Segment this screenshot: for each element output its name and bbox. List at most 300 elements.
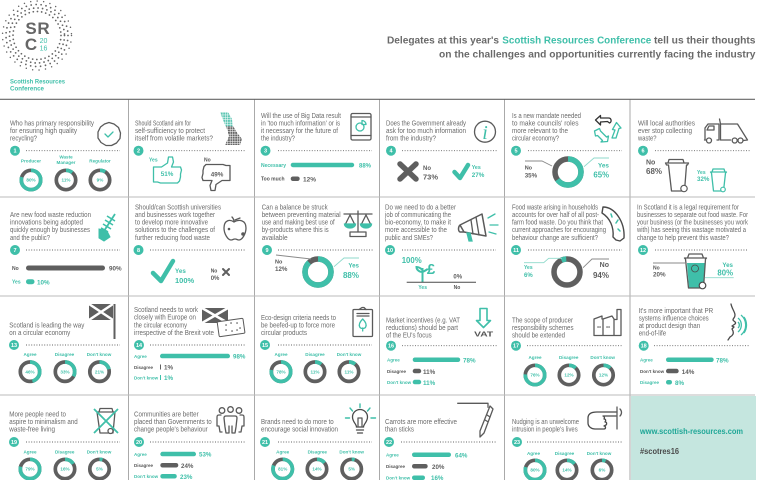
donut: 65% yes xyxy=(555,159,581,185)
question text: be beefed-up to force more xyxy=(261,322,335,330)
donut: Agree 80%: 80% xyxy=(530,468,540,473)
panel: question 16 xyxy=(386,308,497,387)
question text xyxy=(134,307,214,337)
question text: circular products xyxy=(261,330,307,337)
question text: Should/can Scottish universities xyxy=(135,204,221,212)
donut: Agree 46%: 46% xyxy=(25,369,35,374)
panel: question 3 xyxy=(260,113,372,184)
question text: to make councils' roles xyxy=(512,120,579,128)
question text: Do we need to do a better xyxy=(385,204,457,212)
bar: Agree 78%: Agree xyxy=(387,358,400,362)
bar: Don't know 11%: 11% xyxy=(423,380,436,387)
number badge: 13 xyxy=(11,343,17,349)
question text: Does the Government already xyxy=(386,120,466,128)
callout: Yes 88%: 88% xyxy=(343,271,359,280)
number badge: 3 xyxy=(264,149,267,155)
label: Regulator: Regulator xyxy=(89,158,111,164)
callout: Yes 80% xyxy=(705,262,734,278)
value: Yes 27% xyxy=(472,165,485,179)
axis label: No: No xyxy=(454,285,460,291)
icon: badge with check xyxy=(98,122,120,146)
donut: Disagree 16%: 16% xyxy=(60,467,70,472)
value: No 0%: No xyxy=(211,268,217,274)
bar: Don't know 1%: Don't know xyxy=(134,376,159,380)
label: Agree: Agree xyxy=(527,451,540,456)
question text: The scope of producer xyxy=(512,318,574,324)
question text: should be extended xyxy=(512,332,565,340)
icon: check xyxy=(454,165,468,178)
number badge: 19 xyxy=(11,440,17,446)
icon: face with sound waves xyxy=(728,304,747,340)
question text: on a circular economy xyxy=(9,330,71,337)
number badge: 14 xyxy=(136,343,143,349)
callout: No 20% xyxy=(653,263,685,278)
question text: use and making best use of xyxy=(262,220,335,226)
callout: No 12%: 12% xyxy=(275,266,288,273)
title: tell us their thoughts xyxy=(654,34,756,46)
bar: Disagree 11%: Disagree xyxy=(387,369,407,374)
callout: No 94%: No xyxy=(600,262,609,269)
callout: No 35%: No xyxy=(525,166,533,172)
number badge: 11 xyxy=(513,248,519,254)
bar: Agree 78%: Agree xyxy=(640,358,653,362)
question text: job of communicating the xyxy=(384,212,451,219)
callout: Yes 65% xyxy=(584,158,609,180)
hashtag: #scotres16 xyxy=(640,447,680,456)
panel: question 1 xyxy=(10,120,120,190)
label: Agree: Agree xyxy=(276,450,290,454)
panel: question 6 xyxy=(637,119,750,192)
panel: question 18 xyxy=(639,304,750,387)
question text: irrespective of the Brexit vote xyxy=(134,330,214,337)
number badge: 2 xyxy=(137,149,140,155)
value: Yes 100%: Yes xyxy=(175,268,186,275)
question text: behaviour change are sufficient? xyxy=(512,235,598,242)
callout: No 35% xyxy=(525,161,552,180)
question text xyxy=(386,120,466,142)
label: Disagree: Disagree xyxy=(55,352,75,357)
question text: between preventing material xyxy=(262,212,341,219)
panel: question 22 xyxy=(384,403,496,480)
bar: Necessary 88%: 88% xyxy=(359,164,372,170)
question text: the industry? xyxy=(261,136,295,142)
bar: Agree 64%: 64% xyxy=(455,452,468,459)
logo: SRC 2016: R xyxy=(37,19,50,38)
callout: Yes 88%: Yes xyxy=(348,262,360,270)
value: No 73% xyxy=(423,166,438,182)
question text: change to help prevent this waste? xyxy=(637,235,729,242)
icon: plant with pound sign: £ xyxy=(427,261,436,278)
donut: Disagree 14%: 14% xyxy=(312,467,322,472)
value: No 68%: 68% xyxy=(646,167,662,176)
axis label: Yes: Yes xyxy=(418,285,427,291)
bar: Disagree 11%: 11% xyxy=(423,369,436,376)
label: Waste Manager: Manager xyxy=(57,160,76,165)
callout: Yes 65%: Yes xyxy=(598,162,609,170)
question text: from the industry? xyxy=(386,136,436,142)
question text xyxy=(512,204,606,242)
question text: in 'too much information' or is xyxy=(261,120,340,128)
question text: more relevant to the xyxy=(512,128,568,135)
bar: Agree 78% xyxy=(387,358,476,364)
donut: Don't know 21%: 21% xyxy=(95,369,104,374)
number badge: 4 xyxy=(389,149,393,155)
label: Agree: Agree xyxy=(528,355,542,360)
bar: Don't know 14%: 14% xyxy=(682,369,695,376)
callout: Yes 6%: Yes xyxy=(524,265,533,271)
value: Yes 27%: 27% xyxy=(472,172,485,179)
question text: circular economy? xyxy=(512,136,559,142)
number badge: 7 xyxy=(13,248,17,254)
icon: clipboard with leaf xyxy=(353,308,372,336)
bar: Don't know 11%: Don't know xyxy=(387,380,412,385)
icon: thumb down 49%: 49% xyxy=(211,172,224,178)
bar: Agree 98% xyxy=(134,354,246,360)
donut: Don't know 5%: 5% xyxy=(348,467,355,472)
bar: Agree 53% xyxy=(134,452,212,458)
icon: scales xyxy=(344,211,372,236)
value: 0%: 0% xyxy=(453,274,463,280)
panel: question 19 xyxy=(8,408,120,479)
question text: businesses to separate out food waste. For xyxy=(637,212,749,219)
bar: Agree 78%: 78% xyxy=(463,358,476,364)
icon: tablet with chart xyxy=(351,114,371,140)
question text: Carrots are more effective xyxy=(385,419,457,426)
panel: question 12 xyxy=(636,204,749,289)
bar: Disagree 1% xyxy=(134,364,174,372)
question text xyxy=(8,412,78,434)
value: No 0% xyxy=(211,268,220,282)
bar: Disagree 24%: Disagree xyxy=(134,463,154,468)
bar: No 90%: 90% xyxy=(109,266,122,272)
question text xyxy=(512,113,581,142)
icon: UK map xyxy=(220,112,242,145)
question text: to develop more innovative xyxy=(135,220,208,226)
bar: Necessary 88%: Necessary xyxy=(261,163,286,169)
donut: Disagree 33%: 33% xyxy=(60,369,70,374)
question text: the circular economy xyxy=(134,322,187,329)
callout: Yes 65%: 65% xyxy=(593,170,609,180)
donut: Agree 81%: 81% xyxy=(278,467,287,472)
question text: Food waste arising in households xyxy=(512,204,598,212)
bar: Too much 12% xyxy=(261,176,316,184)
question text xyxy=(9,322,85,337)
question text xyxy=(10,120,94,142)
donut: Producer 80%: 80% xyxy=(26,178,36,183)
callout: Yes 6% xyxy=(524,258,562,279)
donut: Don't know 6%: 6% xyxy=(599,468,605,473)
question text: itself from volatile markets? xyxy=(135,136,213,142)
number badge: 16 xyxy=(388,344,394,350)
callout: Yes 6%: 6% xyxy=(524,273,533,279)
donut: Don't know 5%: 5% xyxy=(96,467,103,472)
panel: question 10 xyxy=(384,204,498,291)
bar: Too much 12%: 12% xyxy=(303,176,316,184)
title: Delegates at this year's xyxy=(387,34,499,46)
question text xyxy=(384,204,457,242)
logo: SRC 2016 xyxy=(2,1,72,92)
question text xyxy=(10,212,91,242)
question text: change people's behaviour xyxy=(134,427,208,434)
label: Disagree: Disagree xyxy=(305,352,325,357)
panel: question 7 xyxy=(10,212,122,286)
label: Don't know: Don't know xyxy=(590,355,615,360)
icon: megaphone xyxy=(458,214,498,241)
question text: solutions to the challenges of xyxy=(135,227,215,234)
bar: Disagree 24% xyxy=(134,463,194,470)
bar: Agree 98%: 98% xyxy=(233,354,246,360)
label: Don't know: Don't know xyxy=(87,450,112,454)
value: No 68%: No xyxy=(646,160,655,166)
question text: at product design than xyxy=(639,323,700,330)
panel: question 15 xyxy=(260,308,372,381)
question text xyxy=(636,204,749,242)
question text: your business (or the businesses you work xyxy=(637,220,748,226)
bar: No 90% xyxy=(12,266,122,272)
bar: Don't know 11% xyxy=(387,380,436,387)
label: Waste Manager xyxy=(57,154,76,165)
bar: Necessary 88% xyxy=(261,163,372,170)
question text xyxy=(512,318,574,340)
callout: No 12% xyxy=(275,255,311,273)
logo: SRC 2016: Conference xyxy=(10,86,44,92)
donut: Don't know 12%: 12% xyxy=(599,373,608,378)
question text: aspire to minimalism and xyxy=(9,419,78,426)
question text: In Scotland it is a legal requirement for xyxy=(637,204,740,212)
question text: accounts for over half of all post- xyxy=(512,212,600,219)
callout: No 94%: 94% xyxy=(593,271,609,280)
value: Yes 32%: 32% xyxy=(697,176,710,183)
question text: ask for too much information xyxy=(386,128,466,135)
panel: question 14 xyxy=(134,307,246,382)
logo: SRC 2016: C xyxy=(25,35,37,54)
icon: down arrow and VAT: VAT xyxy=(474,332,494,338)
question text xyxy=(639,308,713,338)
label: Don't know: Don't know xyxy=(337,352,362,357)
question text: public and SMEs? xyxy=(385,235,433,242)
panel: question 11 xyxy=(511,204,624,289)
label: Disagree: Disagree xyxy=(559,355,579,360)
label: Producer: Producer xyxy=(21,158,41,164)
question text: waste? xyxy=(637,136,657,142)
question text: current approaches for encouraging xyxy=(512,227,606,234)
question text: Nudging is an unwelcome xyxy=(512,419,579,426)
panel: question 4 xyxy=(386,120,497,182)
question text: Brands need to do more to xyxy=(261,419,334,426)
website address: www.scottish-resources.com xyxy=(639,426,743,436)
question text xyxy=(386,318,461,340)
callout: Yes 80%: 80% xyxy=(717,268,733,278)
value: Yes 100%: 100% xyxy=(175,276,195,285)
icon: fish bones xyxy=(99,214,115,241)
question text: reductions) should be part xyxy=(386,325,458,332)
bar: Agree 64% xyxy=(386,452,468,459)
donut: Disagree 14%: 14% xyxy=(562,468,572,473)
label: Agree: Agree xyxy=(274,352,288,357)
bar: Disagree 8%: 8% xyxy=(675,380,685,387)
callout: No 20%: No xyxy=(653,266,660,272)
number badge: 1 xyxy=(13,149,17,155)
label: Don't know: Don't know xyxy=(587,451,612,456)
panel: question 8 xyxy=(134,204,246,285)
bar: Agree 53%: 53% xyxy=(199,452,212,458)
bar: Yes 10%: Yes xyxy=(12,280,21,286)
bar: Disagree 11% xyxy=(387,369,436,376)
value: No 73%: No xyxy=(423,166,431,172)
bar: Disagree 8% xyxy=(640,380,685,387)
bar: Disagree 20%: 20% xyxy=(432,464,445,471)
question text xyxy=(637,120,695,142)
number badge: 18 xyxy=(641,344,647,350)
question text: than sticks xyxy=(385,427,414,434)
question text: it necessary for the future of xyxy=(261,128,338,135)
logo: SRC 2016: 20 xyxy=(40,38,47,45)
label: Don't know: Don't know xyxy=(339,450,364,454)
callout: No 12%: No xyxy=(275,260,283,266)
question text: available xyxy=(262,235,288,242)
label: Don't know: Don't know xyxy=(87,352,112,357)
value: Yes 27%: Yes xyxy=(472,165,481,171)
panel: question 13 xyxy=(9,304,120,381)
panel: question 5 xyxy=(511,113,622,185)
bar: Don't know 1%: 1% xyxy=(164,375,174,382)
question text xyxy=(135,204,221,242)
icon: thumb up 51%: 51% xyxy=(161,171,174,178)
icon: group of people xyxy=(217,407,244,433)
logo: SRC 2016: 16 xyxy=(40,46,47,52)
number badge: 9 xyxy=(265,248,269,254)
donut: Disagree 11%: 11% xyxy=(311,369,319,374)
bar: Disagree 24%: 24% xyxy=(181,463,194,470)
callout: Yes 88% xyxy=(334,258,360,280)
title: on the challenges and opportunities currently facing the industry xyxy=(439,48,756,60)
question text: encourage social innovation xyxy=(261,427,338,434)
bar: Too much 12%: Too much xyxy=(261,176,285,182)
icon: fruit rind xyxy=(602,207,624,241)
question text: Will the use of Big Data result xyxy=(261,113,341,120)
label: Agree: Agree xyxy=(23,352,37,357)
icon: carrot on a stick xyxy=(458,403,493,437)
question text: further reducing food waste xyxy=(135,235,210,242)
title: Scottish Resources Conference xyxy=(502,34,651,46)
icon: recycling arrows xyxy=(594,116,621,142)
icon: large check xyxy=(153,261,173,281)
question text: Are new food waste reduction xyxy=(10,212,91,219)
donut: Waste Manager 11%: 11% xyxy=(62,178,70,183)
callout: No 20%: 20% xyxy=(653,272,666,278)
value: No 73%: 73% xyxy=(423,172,438,182)
bar: Yes 10%: 10% xyxy=(37,280,50,286)
question text: placed than Governments to xyxy=(134,419,212,426)
label: Disagree: Disagree xyxy=(55,450,75,454)
callout: No 94% xyxy=(583,259,609,280)
label: Disagree: Disagree xyxy=(555,451,575,456)
number badge: 22 xyxy=(386,440,392,446)
question text: Who has primary responsibility xyxy=(10,120,94,128)
question text: Will local authorities xyxy=(638,120,695,128)
question text: Is a new mandate needed xyxy=(512,113,581,120)
icon: factory xyxy=(594,310,621,336)
panel: website and hashtag xyxy=(631,396,756,480)
question text: Market incentives (e.g. VAT xyxy=(386,318,461,324)
question text: More people need to xyxy=(9,412,66,418)
donut: Disagree 12%: 12% xyxy=(564,373,574,378)
question text: Scotland needs to work xyxy=(134,307,198,314)
number badge: 17 xyxy=(513,344,519,350)
question text: quickly enough by businesses xyxy=(10,227,90,234)
question text: systems influence choices xyxy=(639,316,709,322)
question text xyxy=(512,419,579,434)
number badge: 10 xyxy=(387,248,393,254)
bar: Disagree 8%: Disagree xyxy=(640,380,660,385)
question text: more accessible to the xyxy=(385,227,447,234)
icon: information: i xyxy=(482,122,488,144)
question text: recycling? xyxy=(10,136,37,142)
number badge: 21 xyxy=(262,440,268,446)
question text: Can a balance be struck xyxy=(262,204,328,212)
question text: ever stop collecting xyxy=(638,128,692,135)
callout: No 35%: 35% xyxy=(525,172,538,180)
question text: It's more important that PR xyxy=(639,308,713,315)
icon: small cross xyxy=(223,269,229,275)
icon: apple xyxy=(224,217,246,240)
callout: Yes 80%: Yes xyxy=(722,262,734,269)
bar: Don't know 14% xyxy=(640,369,695,376)
value: No 68% xyxy=(646,160,662,176)
question text: self-sufficiency to protect xyxy=(135,128,205,135)
bar: Disagree 1%: Disagree xyxy=(134,365,154,370)
donut: Agree 78%: 78% xyxy=(276,369,286,374)
panel: question 21 xyxy=(260,404,376,479)
bar: Agree 98%: Agree xyxy=(134,354,147,359)
value: Yes 100% xyxy=(175,268,195,285)
panel: question 20 xyxy=(134,407,245,480)
question text xyxy=(261,113,341,142)
bar: Agree 78% xyxy=(640,358,729,364)
bar: Agree 78%: 78% xyxy=(716,358,729,364)
number badge: 5 xyxy=(514,149,518,155)
icon: refuse truck xyxy=(704,119,748,143)
question text xyxy=(134,412,212,434)
question text: Eco-design criteria needs to xyxy=(261,315,336,322)
label: Agree: Agree xyxy=(23,450,37,454)
icon: light bulb xyxy=(346,404,376,433)
question text: closely with Europe on xyxy=(134,315,196,322)
icon: bin with apple, 80% full xyxy=(684,254,706,289)
bar: Disagree 1%: 1% xyxy=(164,364,174,372)
bar: Don't know 1% xyxy=(134,375,174,382)
question text: end-of-life xyxy=(639,330,666,338)
logo: SRC 2016: Scottish Resources xyxy=(10,78,65,86)
bar: Don't know 16% xyxy=(386,475,444,480)
question text xyxy=(261,419,338,434)
panel: question 2 xyxy=(134,112,245,190)
label: Yes: Yes xyxy=(149,158,158,164)
donut: Don't know 11%: 11% xyxy=(345,369,353,374)
question text: and the public? xyxy=(10,235,50,242)
value: Yes 32%: Yes xyxy=(697,170,706,176)
panel: question 23 xyxy=(512,407,622,480)
label: Waste Manager: Waste xyxy=(59,154,73,160)
question text xyxy=(262,204,341,242)
question text: Should Scotland aim for xyxy=(135,120,191,128)
label: No: No xyxy=(204,158,211,164)
question text: Scotland is leading the way xyxy=(9,322,85,330)
question text: responsibility schemes xyxy=(512,325,574,332)
question text: intrusion in people's lives xyxy=(512,427,578,434)
question text xyxy=(261,315,336,337)
number badge: 8 xyxy=(137,248,140,254)
